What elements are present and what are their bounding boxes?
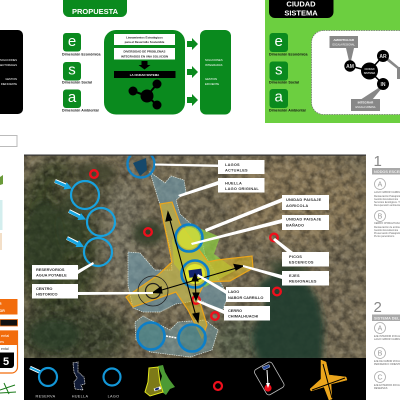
diagram: city system network [312,30,400,114]
label: lagos actuales: LAGOS [225,162,240,167]
legend item: regional axes star [310,360,347,400]
lake: current lakes [128,150,154,178]
label: lago nabor carrillo [226,287,270,302]
label: cerro chimalhuachi [224,306,270,320]
label: cerro chimalhuachi: CERRO [228,308,242,313]
label: lagos actuales [218,160,264,174]
blue circles: reservoirs [71,181,115,266]
panel: left cut-off black box: SOLUCIONES [0,58,17,62]
dimensions, ciudad sistema: Dimensión Ambiental [269,108,306,112]
heading: propuesta [63,0,127,17]
panel: outcomes green box: INTEGRADAS [205,63,223,67]
dimensions, ciudad sistema: Dimensión Económica [269,52,309,56]
diagram: city system network: CIUDAD [364,67,375,71]
arrows: black axes [153,212,243,322]
label: unidad paisaje agricola: UNIDAD PAISAJE [286,197,322,202]
panel: right notes 1: B [378,214,383,220]
leader lines [78,164,293,314]
label: huella lago original: HUELLA [225,180,242,186]
label: lago nabor carrillo: NABOR CARRILLO [228,295,263,300]
heading: propuesta: PROPUESTA [72,7,119,16]
legend item: landscape units [145,365,175,396]
legend item: huella: HUELLA [72,394,88,398]
panel: central green proposal box: LA CIUDAD SISTEMA [130,73,160,77]
label: reservorios agua potable [32,265,78,280]
panel: outcomes green box: EFICIENTE [205,82,219,86]
diagram: city system network: AR [379,54,387,60]
footprint: original lake north and centre [128,172,228,312]
panel: right notes 1: Punto panorámico [374,235,395,238]
panel: dimensions, propuesta: a [68,89,77,106]
legend item: lago: LAGO [108,394,119,398]
axes: regional cross [126,202,253,338]
panel: dimensions, propuesta: Dimensión Ambiental [62,108,99,112]
dimensions, ciudad sistema [269,33,309,112]
panel: outcomes green box: SOLUCIONES [205,58,223,62]
card: orange environmental: 5 [3,356,9,368]
diagram: city system network: IN [380,82,386,88]
label: picos escenicos: PICOS [289,254,302,259]
panel: dimensions, propuesta: s [68,62,76,78]
map top edge [24,154,366,156]
panel: right notes 2: RESERVAS [374,387,388,390]
label: huella lago original: LAGO ORIGINAL [225,186,259,191]
dimensions, ciudad sistema: e [275,33,283,50]
heading: ciudad sistema [269,0,334,18]
panel: central green proposal box: INTEGRADOS EN UNA SOLUCION [121,54,168,58]
diagram: city system network: AMORTIGUAR [333,38,355,42]
lake: nabor carrillo [138,224,208,352]
unit: agricultural landscape [172,224,236,287]
panel: dimensions, propuesta [62,33,102,112]
ring: historic centre [138,276,168,306]
panel: central green proposal box: DIVERSIDAD DE PROBLEMAS [124,50,166,54]
legend item: reserva [30,368,57,398]
label: picos escenicos [282,252,329,266]
panel: left cut-off black box [0,30,23,114]
panel: right notes 2: B [378,350,383,358]
panel: central green proposal box [104,30,185,114]
panel: central green proposal box: para el Desarrollo Sostenible [125,40,165,44]
label: unidad paisaje banado: UNIDAD PAISAJE [286,216,322,222]
unit: flooded landscape [178,227,200,249]
panel: dimensions, propuesta: Dimensión Económica [62,52,102,56]
legend: black strip [24,358,366,400]
legend item: lake and hill link [253,361,285,396]
panel: left cut-off black box: INEFICIENTE [1,82,17,86]
heading: ciudad sistema: SISTEMA [284,8,318,18]
diagram: city system network: INTEGRAR [358,100,374,104]
diagram: city system network: AM [346,64,354,70]
label: unidad paisaje banado [282,215,329,230]
panel: right notes 2: 2 [374,299,382,316]
card: orange environmental: ental [1,347,9,351]
small outlined box [0,136,17,146]
label: lago nabor carrillo: LAGO [228,289,239,294]
label: centro historico: HISTORICO [36,292,58,296]
legend item: huella [72,362,88,398]
diagram: city system network: SISTEMA [364,71,375,75]
left column: cut-off sidebar fragments [0,175,18,394]
legend item: reserva: RESERVA [36,394,56,398]
label: huella lago original [218,178,264,192]
label: unidad paisaje agricola [282,195,329,210]
red rings: scenic peaks [90,170,281,320]
label: centro historico [32,284,78,298]
panel: outcomes green box: GESTION [205,77,217,81]
diagram: city system network: ESCALA URBANA [356,106,376,109]
card: orange environmental [0,331,18,373]
legend item: peak [214,382,222,390]
label: reservorios agua potable: RESERVORIOS [36,267,65,272]
panel: right notes 1: A [378,182,383,188]
dimensions, ciudad sistema: s [275,62,282,78]
panel: right notes 1: 1 [374,153,382,170]
panel: right notes 2 [372,299,400,390]
panel: left cut-off black box: GESTION [5,77,17,81]
panel: right notes 1: Gestión Ecosistémica [374,229,399,232]
label: ejes regionales: REGIONALES [289,278,317,284]
panel: right notes 2: A [378,326,383,332]
card: orange environmental: es [0,340,4,344]
label: lagos actuales: ACTUALES [225,168,248,172]
legend item: lago [104,368,120,398]
label: reservorios agua potable: AGUA POTABLE [36,272,67,278]
panel: right notes 1: Gestión Ecosistémica [374,198,399,201]
label: ejes regionales: EJES [289,273,300,278]
label: cerro chimalhuachi: CHIMALHUACHI [228,314,258,318]
dimensions, ciudad sistema: a [275,88,284,106]
dimensions, ciudad sistema: Dimensión Social [269,80,299,84]
panel: ciudad sistema [265,0,400,123]
label: centro historico: CENTRO [36,286,52,291]
panel: dimensions, propuesta: Dimensión Social [62,80,92,84]
panel: right notes 2: SISTEMA DEL [374,316,400,320]
arrows: cyan reservoir pointers [55,181,81,244]
arrows: to outcomes [187,38,198,106]
label: picos escenicos: ESCENICOS [289,260,314,264]
panel: right notes 1 [372,153,400,238]
panel: central green proposal box: Lineamientos Estratégicos [126,36,163,40]
panel: outcomes green box [200,30,231,114]
diagram: city system network: ESCALA REGIONAL [333,44,356,46]
label: unidad paisaje banado: BAÑADO [286,222,304,228]
footprint: original lake south [135,316,218,357]
card: orange environmental: ental [1,334,9,338]
label: unidad paisaje agricola: AGRICOLA [286,203,308,208]
panel: right notes 2: C [377,374,383,382]
map: satellite view [24,156,366,358]
label: ejes regionales [282,271,329,286]
satellite terrain [10,155,375,365]
panel: dimensions, propuesta: e [68,33,76,50]
arrow: between southern lakes [166,336,177,338]
